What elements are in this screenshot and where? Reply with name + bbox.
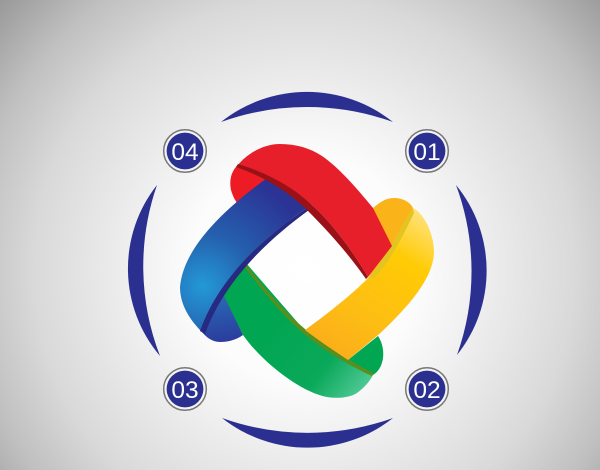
yellow band body <box>305 208 434 360</box>
crescent: right <box>456 185 487 355</box>
ribbon knot <box>180 144 434 398</box>
badge 04 <box>164 130 206 172</box>
green band body <box>222 263 373 398</box>
badge 04: 04 <box>171 139 199 166</box>
badge 02 <box>406 368 448 410</box>
blue band body <box>180 178 310 332</box>
badge 02: 02 <box>413 377 441 404</box>
red band back cap <box>230 165 270 204</box>
green band back cap <box>348 336 383 375</box>
crescent: top <box>221 92 393 122</box>
yellow band back cap <box>368 198 413 277</box>
blue band shadow edge <box>200 206 310 334</box>
blue band lower cap <box>202 290 243 342</box>
yellow band fold edge <box>368 208 414 278</box>
red band dark edge <box>236 164 368 279</box>
badge 01 <box>406 130 448 172</box>
crescent: bottom <box>222 418 393 448</box>
green band olive edge <box>243 262 374 376</box>
badge 03: 03 <box>171 377 199 404</box>
outer ring crescents <box>128 92 487 448</box>
badge 01: 01 <box>413 139 441 166</box>
crescent: left <box>128 185 160 356</box>
red band body <box>238 144 392 277</box>
badge 03 <box>164 368 206 410</box>
